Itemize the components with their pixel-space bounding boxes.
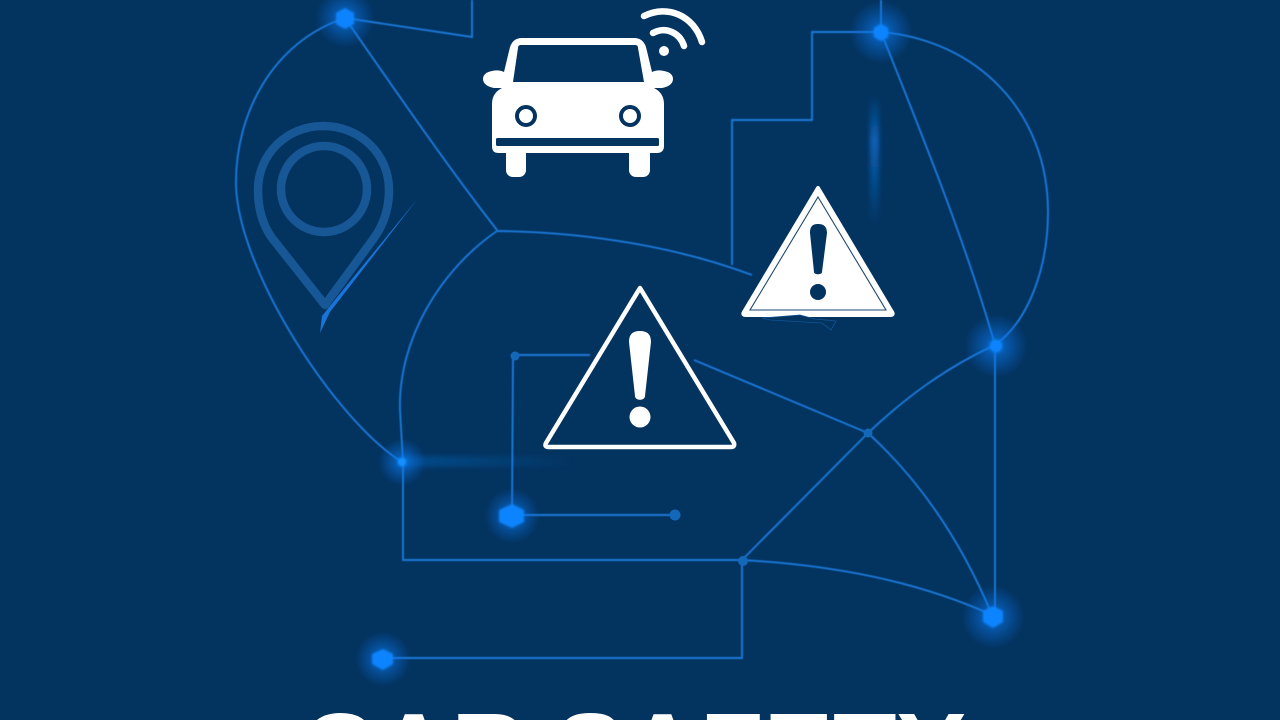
node: top left: [315, 0, 375, 48]
network lines: [236, 0, 1048, 658]
node: circuit: [484, 488, 540, 544]
node: bottom right: [961, 585, 1025, 649]
icon: filled warning triangle: [743, 188, 893, 330]
node: right: [964, 314, 1028, 378]
icon: connected car: [483, 11, 702, 177]
small junctions: [510, 352, 872, 566]
glowing nodes: [315, 0, 1028, 687]
remnant below triangle: [762, 315, 836, 330]
break in triangle edge: [854, 239, 865, 256]
node: bottom left: [355, 631, 411, 687]
exclamation mark: [810, 224, 827, 274]
exclamation mark: [629, 331, 651, 400]
windshield: [513, 45, 644, 82]
icon: location pin: [258, 126, 419, 333]
node: top right: [849, 0, 913, 64]
car body: [483, 38, 673, 177]
headlights: [517, 107, 639, 125]
node: left: [378, 438, 426, 486]
grille bar: [496, 138, 659, 146]
wifi signal: [644, 11, 702, 56]
icon: outlined warning triangle: [545, 288, 734, 447]
light streaks: [403, 95, 879, 467]
